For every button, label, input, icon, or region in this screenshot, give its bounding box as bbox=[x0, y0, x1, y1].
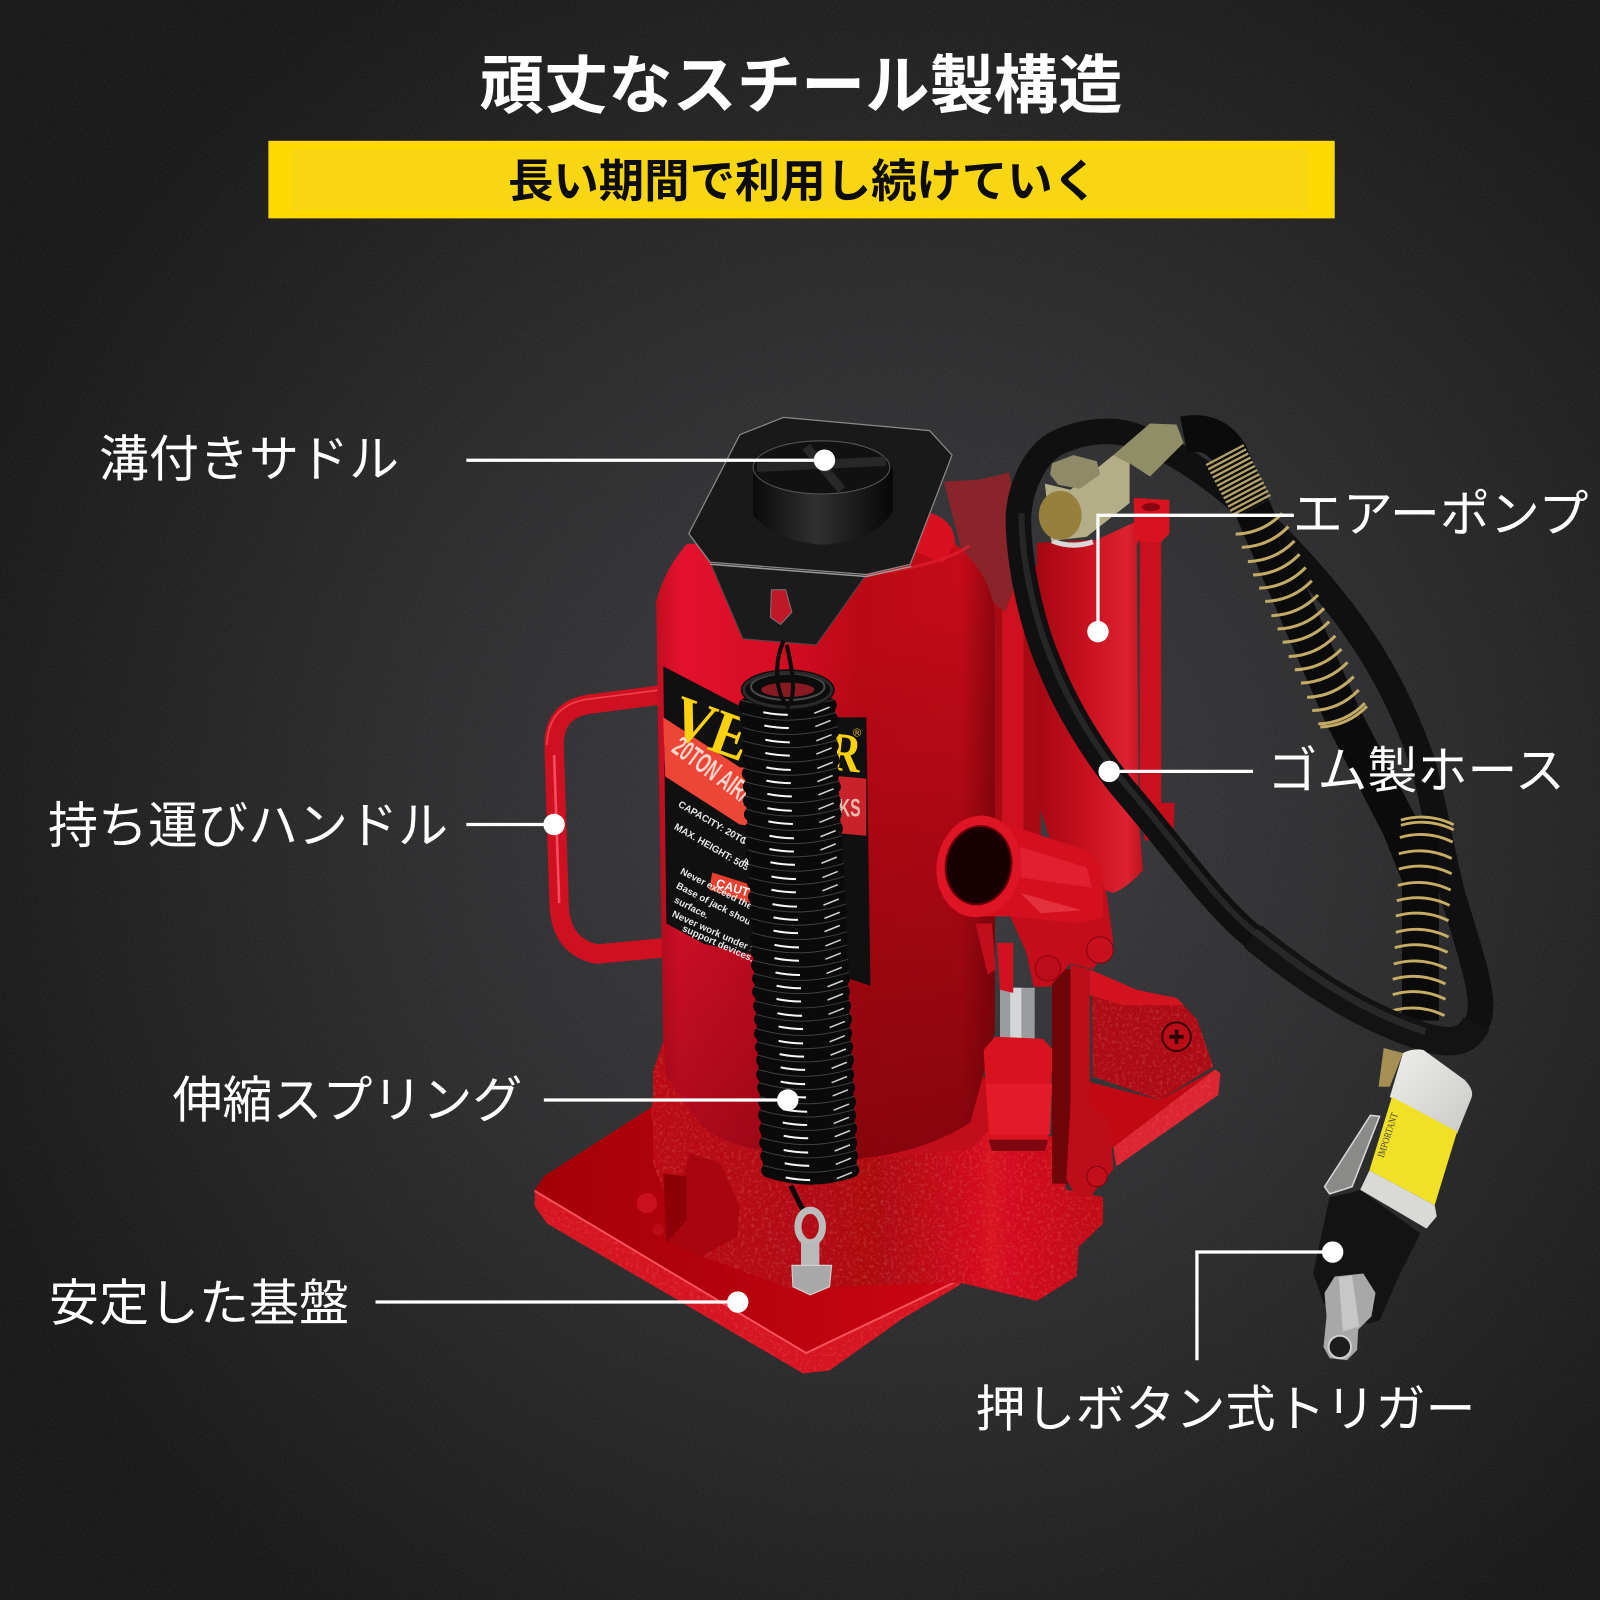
subtitle banner: 長い期間で利用し続けていく bbox=[508, 156, 1098, 207]
handle bbox=[547, 690, 673, 954]
callout: stable base bbox=[49, 1275, 748, 1331]
warning label: CAPACITY: 20TON bbox=[676, 799, 755, 851]
trigger body bbox=[1313, 1190, 1420, 1323]
white cap bbox=[1390, 1049, 1472, 1134]
piston rod and nut bbox=[976, 923, 1053, 1151]
leader line bbox=[376, 1300, 738, 1304]
push-button trigger bbox=[1313, 1048, 1472, 1360]
dot bbox=[1098, 761, 1120, 782]
bottle jack illustration bbox=[535, 417, 1481, 1373]
label: 押しボタン式トリガー bbox=[976, 1382, 1476, 1438]
pump socket lever bbox=[929, 809, 1113, 987]
warning label: CAUTI bbox=[714, 876, 754, 901]
label: エアーポンプ bbox=[1293, 487, 1588, 543]
label: ゴム製ホース bbox=[1267, 743, 1565, 799]
leader line bbox=[1098, 515, 1294, 632]
label: 持ち運びハンドル bbox=[48, 798, 448, 854]
callout: rubber hose bbox=[1098, 743, 1565, 799]
spring anchor bolt bbox=[792, 1210, 832, 1295]
side bracket bbox=[1324, 1115, 1380, 1194]
label: 溝付きサドル bbox=[99, 432, 399, 488]
leader line bbox=[1109, 770, 1253, 773]
title: 頑丈なスチール製構造 bbox=[480, 50, 1122, 122]
air pump cylinder bbox=[944, 472, 1174, 893]
lower plate bbox=[1360, 1170, 1437, 1229]
callout: grooved saddle bbox=[99, 432, 835, 488]
dot bbox=[777, 1089, 798, 1111]
lower spring guard bbox=[1392, 815, 1454, 1016]
warning label: VOR bbox=[761, 714, 865, 785]
callout: air pump bbox=[1087, 487, 1588, 642]
extension spring bbox=[741, 641, 858, 1212]
leader line bbox=[466, 823, 554, 826]
brass swivel fitting bbox=[1039, 423, 1184, 541]
leader line bbox=[466, 459, 824, 462]
warning label: surface. bbox=[672, 895, 710, 922]
warning label: VE bbox=[662, 682, 761, 776]
short spring above trigger bbox=[1379, 1048, 1403, 1087]
saddle plate bbox=[689, 417, 952, 645]
collar and casting bbox=[637, 1033, 1103, 1301]
callout: push-button trigger bbox=[976, 1241, 1476, 1438]
warning label: KS bbox=[839, 795, 861, 822]
air plug bbox=[1323, 1273, 1376, 1360]
warning label: MAX. HEIGHT: 505mm bbox=[672, 822, 766, 882]
warning label: AIR bbox=[741, 856, 760, 871]
grooved saddle cap bbox=[753, 441, 893, 545]
callout: carrying handle bbox=[48, 798, 565, 854]
leader line bbox=[1197, 1252, 1333, 1360]
label: 伸縮スプリング bbox=[172, 1072, 522, 1128]
pump link arm bbox=[1052, 964, 1113, 1197]
warning label: ® bbox=[853, 728, 862, 740]
dot bbox=[814, 449, 835, 471]
dot bbox=[543, 814, 565, 835]
hose to trigger bbox=[1184, 434, 1439, 1020]
dot bbox=[1322, 1241, 1343, 1263]
warning label: support devices. bbox=[680, 923, 755, 965]
warning label: Base of jack should alway bbox=[674, 881, 787, 945]
subtitle banner bbox=[268, 141, 1335, 218]
rubber hose loop bbox=[1018, 431, 1481, 1041]
callout: extension spring bbox=[172, 1072, 798, 1128]
warning label: Never exceed the jack's r bbox=[678, 866, 786, 929]
yellow warning sticker: IMPORTANT bbox=[1375, 1111, 1400, 1159]
upper spring guard bbox=[1224, 454, 1369, 732]
base plate bbox=[535, 1108, 969, 1373]
warning label: Never work under the lift lo bbox=[670, 909, 789, 970]
main cylinder body bbox=[656, 510, 995, 1160]
rear foot with screw bbox=[1088, 969, 1220, 1166]
warning label: MIN bbox=[741, 835, 761, 851]
dot bbox=[727, 1291, 748, 1313]
yellow warning sticker bbox=[1369, 1097, 1457, 1205]
warning label: 20TON AIR/MANU bbox=[667, 730, 796, 836]
dot bbox=[1087, 621, 1109, 642]
hose overlap at lower loop bbox=[1253, 932, 1477, 1041]
label: 安定した基盤 bbox=[49, 1275, 349, 1331]
warning label bbox=[662, 666, 870, 986]
leader line bbox=[544, 1098, 788, 1102]
